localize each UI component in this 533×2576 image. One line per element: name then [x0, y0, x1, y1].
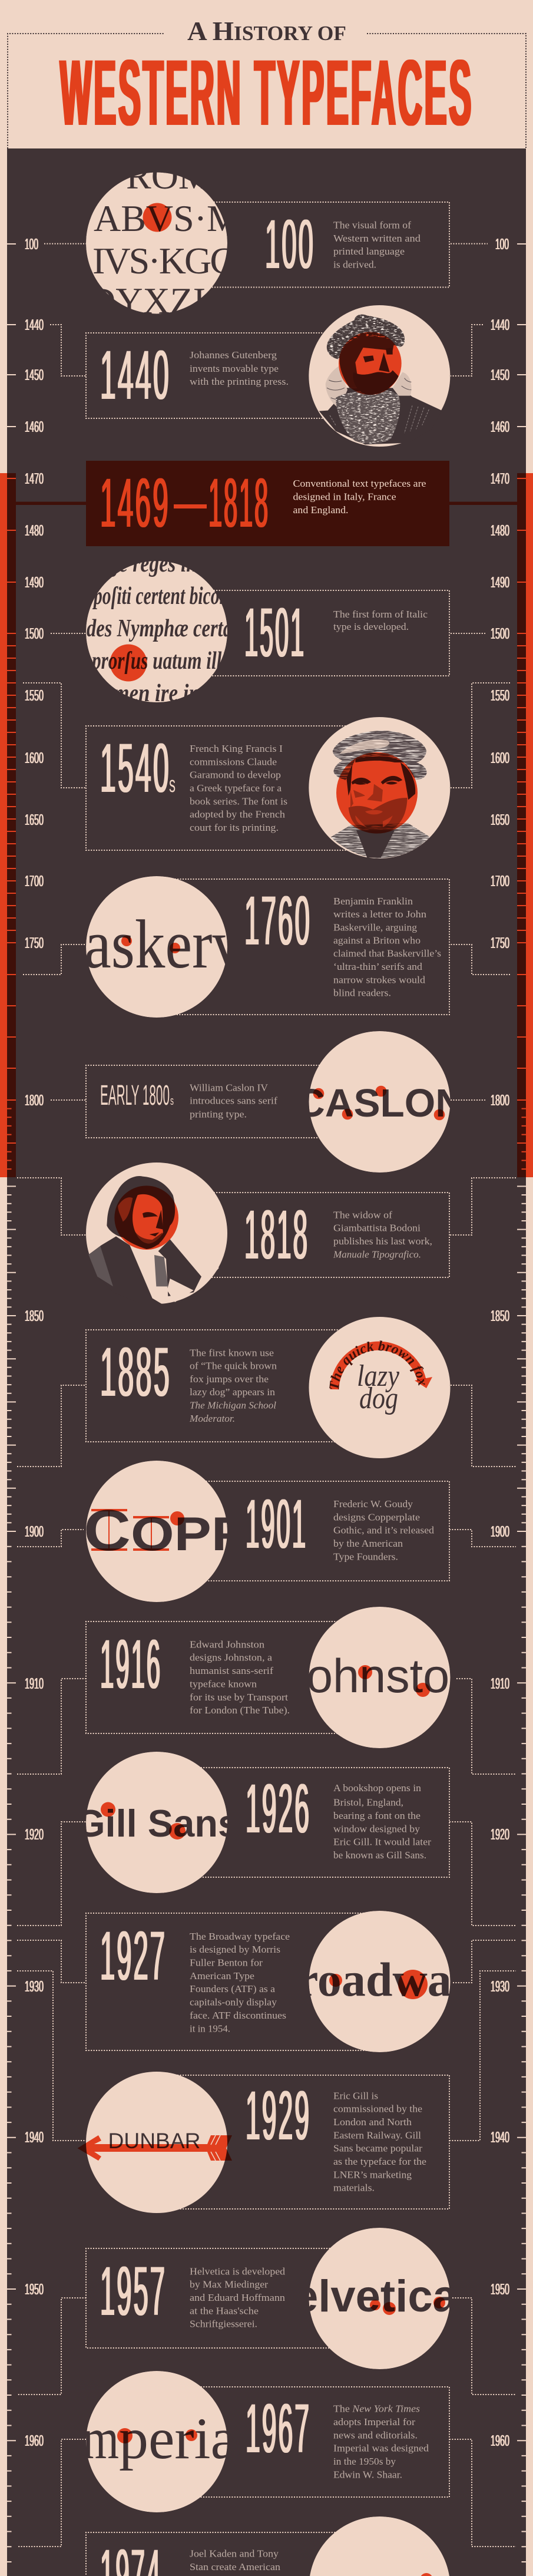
timeline year labels, right: 1930 [491, 1977, 509, 1995]
timeline year labels, right: 1500 [491, 625, 509, 642]
circle: Caslon type: CASLON [296, 1081, 464, 1125]
panel: 1967 Imperial: 1967 [246, 2390, 311, 2468]
panel: 1818 Bodoni: 1818 [244, 1196, 309, 1274]
description [189, 1347, 277, 1424]
description: Joel Kaden and Tony [190, 2548, 279, 2560]
description: Baskerville, arguing [333, 922, 418, 933]
dotted box [86, 1913, 379, 2050]
connector [17, 1971, 516, 2141]
description: The visual form of [333, 219, 411, 231]
panel: year 100 [44, 172, 488, 313]
panel: 1916 Johnston: 1916 [100, 1626, 162, 1703]
dotted box [157, 879, 449, 1015]
timeline year labels, left: 1490 [25, 573, 44, 591]
description: humanist sans-serif [190, 1665, 273, 1676]
timeline year labels, right: 1650 [491, 811, 509, 828]
timeline year labels, right: 1450 [491, 366, 509, 384]
header dotted frame [8, 34, 526, 148]
description [190, 349, 289, 387]
description [333, 2090, 426, 2194]
circle: Broadway type: roadwa [297, 1953, 452, 2006]
timeline year labels, left: 1910 [25, 1675, 44, 1692]
description: Johannes Gutenberg [190, 349, 277, 361]
description [190, 1082, 277, 1119]
circle: Roman capitals: IVS·KGC [92, 240, 235, 282]
description [333, 896, 441, 999]
dotted box [86, 1065, 379, 1138]
description: Western written and [333, 233, 421, 244]
panel: 1901 Copperplate: 1901 [246, 1485, 307, 1563]
timeline year labels, left: 1800 [25, 1091, 44, 1109]
timeline year labels, right: 1440 [491, 316, 509, 333]
panel: 1885 quick brown fox: 1885 [100, 1333, 171, 1411]
timeline year labels, right: 1920 [491, 1825, 509, 1843]
circle: Gill Sans type [86, 1752, 227, 1893]
dotted box [157, 1193, 449, 1277]
circle: italic type: des Nymphæ certa [87, 615, 233, 642]
circle: Baskerville type: askerv [84, 906, 243, 983]
red era margins and maroon scale strips [0, 473, 533, 1177]
description: fox jumps over the [190, 1373, 269, 1385]
description: of “The quick brown [190, 1360, 277, 1372]
connector [17, 1940, 516, 1983]
description: Bristol, England, [333, 1797, 403, 1808]
description: with the printing press. [190, 376, 289, 387]
description [190, 2548, 281, 2572]
connector [51, 1099, 485, 1101]
description: printing type. [190, 1108, 247, 1119]
description: blind readers. [333, 988, 391, 999]
description [190, 743, 287, 833]
timeline year labels, left: 1650 [25, 811, 44, 828]
connector [17, 1679, 516, 1774]
timeline year labels, left: 1750 [25, 934, 44, 952]
description: Type Founders. [333, 1551, 398, 1562]
description: invents movable type [190, 363, 279, 374]
circle: Copperplate type [86, 1461, 227, 1602]
timeline year labels, left [25, 235, 44, 2449]
description: Fuller Benton for [190, 1957, 263, 1968]
description: designs Copperplate [333, 1511, 420, 1523]
description: and Eduard Hoffmann [190, 2292, 286, 2303]
description: American Type [190, 1970, 254, 1981]
panel: 1885 quick brown fox [17, 1317, 516, 1467]
description: The New York Times [333, 2403, 420, 2415]
dotted box [157, 590, 449, 676]
description: face. ATF discontinues [190, 2010, 286, 2021]
description: news and editorials. [333, 2429, 418, 2440]
era years: 1469 [100, 464, 170, 542]
portrait: Garamond [309, 717, 450, 858]
circle: Copperplate type: C [84, 1498, 131, 1563]
description: Conventional text typefaces are [293, 478, 426, 489]
description: The first form of Italic [333, 609, 428, 620]
description: French King Francis I [190, 743, 283, 754]
description: The Michigan School [190, 1399, 276, 1411]
timeline year labels, left: 1460 [25, 418, 44, 435]
connector [44, 243, 488, 245]
timeline year labels, right: 1800 [491, 1091, 509, 1109]
description: William Caslon IV [190, 1082, 269, 1093]
circle: Johnston type [306, 1607, 450, 1748]
connector [17, 1530, 516, 1547]
panel: 1540s Garamond [23, 683, 510, 858]
description: court for its printing. [190, 822, 279, 833]
timeline year labels, left: 1440 [25, 316, 44, 333]
description: window designed by [333, 1823, 421, 1834]
circle: Roman capitals [86, 172, 227, 313]
description: materials. [333, 2182, 375, 2194]
timeline year labels, right: 1490 [491, 573, 509, 591]
description: designs Johnston, a [190, 1652, 272, 1663]
portrait: Bodoni [86, 1162, 227, 1304]
description: bearing a font on the [333, 1810, 421, 1821]
panel: early 1800s Caslon [51, 1031, 485, 1173]
timeline year labels, left: 1450 [25, 366, 44, 384]
description [293, 478, 426, 516]
description: The widow of [333, 1210, 392, 1221]
description [333, 1498, 435, 1562]
connector [51, 633, 485, 634]
circle: italic type: ge reges in [108, 550, 197, 577]
timeline year labels, left: 1470 [25, 470, 44, 487]
dotted box [86, 1621, 379, 1733]
era box [86, 461, 449, 546]
description: by Max Miedinger [190, 2279, 268, 2290]
description: at the Haas'sche [190, 2305, 259, 2316]
description: narrow strokes would [333, 975, 426, 986]
timeline year labels, right: 1950 [491, 2280, 509, 2298]
circle: Helvetica type: elvetica [293, 2271, 458, 2321]
description: Eric Gill is [333, 2090, 378, 2101]
timeline year labels, left: 1960 [25, 2432, 44, 2449]
description: and England. [293, 504, 349, 516]
timeline year labels, left: 1550 [25, 686, 44, 704]
timeline year labels, right: 1940 [491, 2128, 509, 2146]
timeline year labels, right: 1910 [491, 1675, 509, 1692]
timeline year labels, left: 1940 [25, 2128, 44, 2146]
circle: Imperial type: m [82, 2406, 119, 2471]
description: commissions Claude [190, 756, 277, 767]
timeline year labels, left: 1950 [25, 2280, 44, 2298]
circle: pangram: lazy [357, 1359, 400, 1393]
description: Frederic W. Goudy [333, 1498, 413, 1510]
description [333, 1782, 431, 1861]
timeline year labels, left: 1600 [25, 749, 44, 767]
description: The Broadway typeface [190, 1931, 290, 1942]
panel: 1967 Imperial [17, 2371, 516, 2547]
description: book series. The font is [190, 795, 287, 807]
timeline year labels, left: 1900 [25, 1523, 44, 1540]
dotted box [86, 2248, 379, 2348]
timeline year labels, left: 1480 [25, 521, 44, 539]
circle: Johnston type: ohnsto [306, 1650, 449, 1703]
panel: 1929 Gill Sans LNER: 1929 [246, 2077, 311, 2155]
panel: early 1800s Caslon: EARLY 1800 [100, 1080, 170, 1111]
description: Stan create American [190, 2561, 281, 2572]
timeline year labels, right: 1600 [491, 749, 509, 767]
portrait: Gutenberg [309, 305, 450, 447]
description: Edwin W. Shaar. [333, 2469, 402, 2480]
panel: 1469-1818 era: 1818 [208, 464, 270, 542]
panel: 1901 Copperplate [17, 1461, 516, 1602]
panel: 1916 Johnston [17, 1607, 516, 1774]
description: Eastern Railway. Gill [333, 2129, 421, 2141]
dotted box [86, 1330, 379, 1442]
dotted box [157, 2387, 449, 2497]
timeline scale ticks, left [7, 244, 16, 2562]
description: introduces sans serif [190, 1095, 277, 1107]
connector [17, 2298, 516, 2395]
timeline year labels, left: 1920 [25, 1825, 44, 1843]
circle: Imperial type: peria [119, 2406, 237, 2471]
connector [17, 1822, 516, 1926]
circle: type sample [309, 2516, 450, 2576]
description: type is developed. [333, 621, 409, 632]
timeline year labels, right: 1750 [491, 934, 509, 952]
timeline year labels, right: 1470 [491, 470, 509, 487]
description: in the 1950s by [333, 2456, 396, 2467]
circle: Gill Sans type: Gill Sans [75, 1802, 239, 1845]
circle: Copperplate type: OPP [131, 1508, 249, 1561]
dotted box [157, 1481, 449, 1581]
circle: Imperial type [82, 2371, 237, 2512]
timeline year labels, right: 1700 [491, 872, 509, 890]
description: Garamond to develop [190, 770, 281, 781]
description [190, 2265, 286, 2330]
description: designed in Italy, France [293, 491, 396, 502]
circle: italic type [86, 561, 227, 702]
panel: 1760 Baskerville: 1760 [244, 882, 312, 960]
panel: 1926 Gill Sans: 1926 [246, 1770, 311, 1848]
description: commissioned by the [333, 2103, 422, 2115]
connector [23, 683, 510, 788]
description: publishes his last work, [333, 1236, 432, 1247]
timeline year labels, right: 1850 [491, 1307, 509, 1325]
dotted box [86, 726, 379, 850]
timeline year labels, left: 1930 [25, 1977, 44, 1995]
dotted box [86, 2532, 379, 2576]
dotted box [86, 333, 379, 418]
description: Eric Gill. It would later [333, 1837, 431, 1848]
description: Founders (ATF) as a [190, 1983, 275, 1994]
timeline year labels, right: 1550 [491, 686, 509, 704]
description [333, 2403, 429, 2480]
connector [17, 1178, 516, 1235]
description: for its use by Transport [190, 1692, 288, 1703]
description: Edward Johnston [190, 1639, 265, 1650]
timeline scale ticks, right [517, 244, 526, 2562]
timeline year labels, left: 1850 [25, 1307, 44, 1325]
description: ‘ultra-thin’ serifs and [333, 961, 423, 972]
description: adopts Imperial for [333, 2416, 415, 2428]
timeline year labels, right: 1960 [491, 2432, 509, 2449]
dotted box [157, 2075, 449, 2209]
description [333, 609, 428, 632]
description [190, 1931, 290, 2034]
circle: Caslon type [309, 1031, 450, 1173]
connector [23, 944, 510, 975]
dotted box [157, 202, 449, 288]
timeline year labels, right: 1480 [491, 521, 509, 539]
description: by the American [333, 1538, 403, 1549]
connector [50, 325, 483, 376]
connector [17, 1385, 516, 1467]
panel: 1927 Broadway [17, 1911, 516, 2052]
description: Benjamin Franklin [333, 896, 413, 907]
circle: pangram: dog [359, 1382, 398, 1415]
circle: italic type: tamen ire in [97, 680, 200, 707]
description: lazy dog” appears in [190, 1386, 276, 1398]
description: as the typeface for the [333, 2156, 426, 2167]
description: is designed by Morris [190, 1944, 280, 1955]
circle: Broadway type [297, 1911, 452, 2052]
circle: pangram: The quick brown fox [329, 1340, 425, 1389]
description [333, 1210, 432, 1260]
panel: 1440 Gutenberg: 1440 [100, 336, 171, 414]
description: Sans became popular [333, 2143, 422, 2154]
description: claimed that Baskerville’s [333, 948, 441, 959]
panel: 1501 italic: 1501 [244, 594, 306, 672]
panel: 1540s Garamond: 1540 [100, 729, 171, 807]
description: capitals-only display [190, 1997, 277, 2008]
panel: year 100: 100 [265, 206, 315, 283]
panel: 1929 Gill Sans LNER [17, 1971, 516, 2213]
description: The first known use [190, 1347, 274, 1358]
timeline year labels, right: 1460 [491, 418, 509, 435]
description: Gothic, and it’s released [333, 1525, 435, 1536]
panel: 1927 Broadway: 1927 [100, 1917, 167, 1995]
description: LNER’s marketing [333, 2169, 412, 2180]
title line: A History of: A HISTORY OF [187, 16, 346, 46]
circle: Helvetica type [309, 2228, 450, 2369]
description: typeface known [190, 1679, 257, 1690]
description: Giambattista Bodoni [333, 1223, 421, 1234]
description: for London (The Tube). [190, 1705, 290, 1716]
panel: 1926 Gill Sans [17, 1752, 516, 1926]
circle: italic type: poſiti certent bicor [92, 583, 226, 610]
description: printed language [333, 246, 405, 257]
panel: 1469-1818 era [86, 461, 449, 546]
circle: Dunbar arrow: DUNBAR [108, 2129, 200, 2153]
panel: 1501 italic [51, 550, 485, 707]
description [333, 219, 421, 270]
timeline year labels, right [491, 235, 509, 2449]
circle: Roman capitals: ABVS·M [94, 197, 240, 239]
year suffix: s [169, 772, 176, 797]
timeline year labels, left: 100 [25, 235, 38, 253]
panel: 1440 Gutenberg [50, 305, 483, 447]
description: be known as Gill Sans. [333, 1850, 426, 1861]
timeline year labels, left: 1700 [25, 872, 44, 890]
description: A bookshop opens in [333, 1782, 422, 1794]
header: title block [8, 16, 526, 148]
circle: Roman capitals: DYXZI [88, 280, 206, 322]
description: Helvetica is developed [190, 2265, 286, 2277]
panel: 1818 Bodoni [17, 1162, 516, 1304]
description: it in 1954. [190, 2023, 230, 2034]
circle: pangram [309, 1317, 450, 1458]
timeline year labels, right: 1900 [491, 1523, 509, 1540]
description: Manuale Tipografico. [333, 1249, 421, 1260]
dotted box [157, 1768, 449, 1877]
timeline year labels, left: 1500 [25, 625, 44, 642]
connector [17, 2439, 516, 2547]
description: a Greek typeface for a [190, 782, 282, 794]
description: writes a letter to John [333, 909, 427, 920]
circle: Baskerville type [86, 876, 227, 1018]
description: London and North [333, 2116, 412, 2128]
circle: Dunbar arrow [78, 2072, 232, 2213]
timeline year labels, right: 100 [495, 235, 509, 253]
year suffix: s [170, 1095, 174, 1108]
description: Schriftgiesserei. [190, 2319, 257, 2330]
circle: italic type: prorſus uatum illi [91, 648, 227, 675]
panel: 1957 Helvetica [17, 2228, 516, 2395]
panel: 1957 Helvetica: 1957 [100, 2253, 167, 2330]
panel: 1760 Baskerville [23, 876, 510, 1018]
description: Imperial was designed [333, 2443, 429, 2454]
description: adopted by the French [190, 809, 286, 820]
description: against a Briton who [333, 934, 421, 946]
description [190, 1639, 290, 1716]
description: is derived. [333, 259, 376, 270]
panel: 1974 [86, 2516, 450, 2576]
description: Moderator. [189, 1413, 235, 1424]
circle: Roman capitals: ROM [126, 155, 212, 197]
